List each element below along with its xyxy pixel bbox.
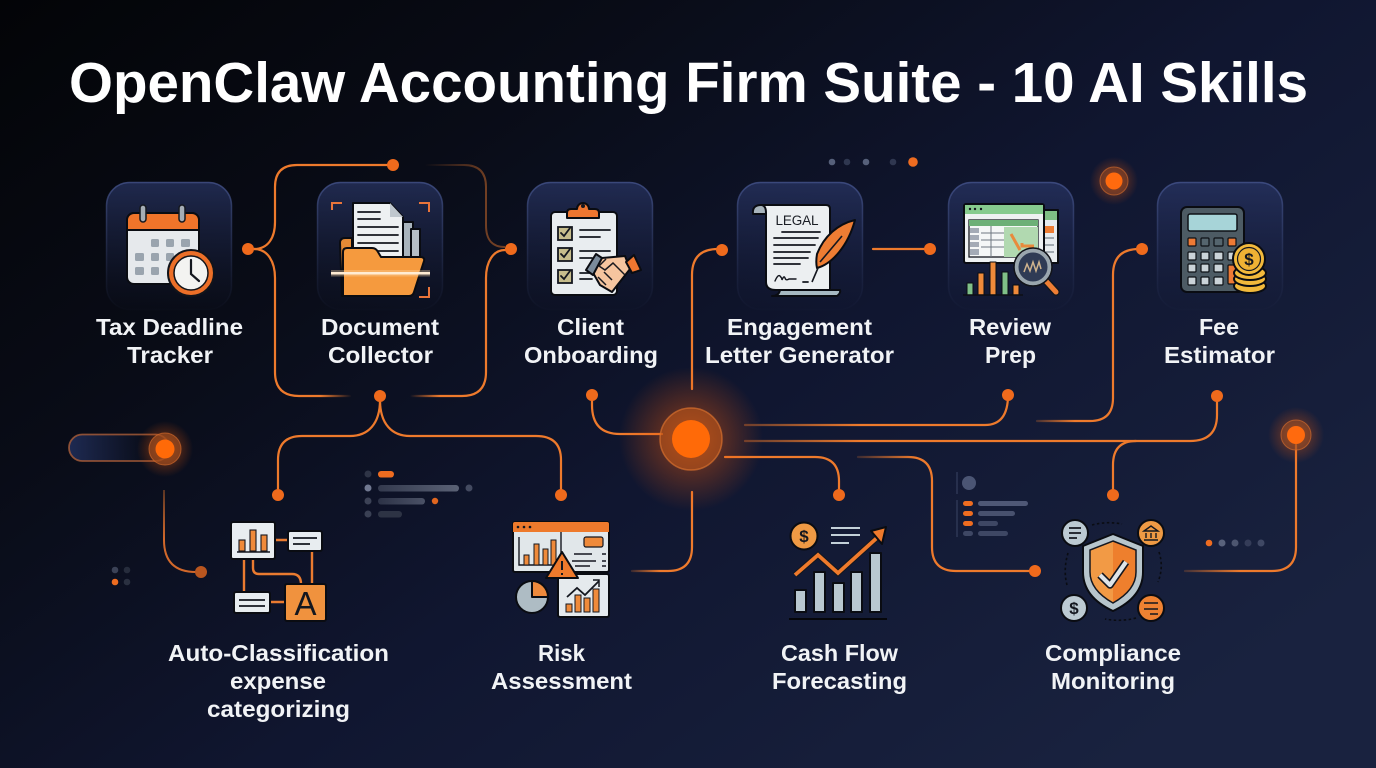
label: Prep	[985, 342, 1036, 368]
icon: chart with rising arrow	[789, 522, 887, 619]
icon: chart with rising arrow: $	[799, 527, 809, 546]
connector: onboarding to lower bracket	[411, 250, 505, 396]
connector: collector branch left	[278, 400, 380, 495]
connector: collector branch right	[380, 400, 561, 495]
connector: risk to hub	[632, 492, 692, 571]
skill: Auto-Classification	[168, 522, 389, 722]
connector: hub to fee estimator	[745, 396, 1217, 441]
label: Auto-Classification	[168, 640, 389, 666]
label: Assessment	[491, 668, 632, 694]
connector: compliance to side hub	[1185, 445, 1296, 571]
label: Compliance	[1045, 640, 1181, 666]
connector: review to fee estimator	[1037, 249, 1142, 421]
connector: hub to engagement letter	[692, 249, 722, 389]
skill: Document Collector	[318, 182, 442, 368]
label: Risk	[538, 640, 585, 666]
connector: hub to cash flow	[725, 457, 839, 495]
icon: legal scroll and quill	[753, 205, 855, 296]
skill: Compliance Monitoring	[1045, 520, 1181, 694]
connector: onboarding to hub	[592, 395, 662, 434]
skill: Tax Deadline Tracker	[96, 182, 243, 368]
skill: Cash Flow Forecasting	[772, 522, 907, 694]
connector: hub to review prep	[745, 395, 1008, 425]
card	[948, 182, 1074, 310]
skill: Client Onboarding	[524, 182, 658, 368]
label: Cash Flow	[781, 640, 898, 666]
glowing node right	[1268, 407, 1324, 463]
label: Fee	[1199, 314, 1239, 340]
icon: clipboard with handshake	[551, 203, 641, 295]
connector: pill to auto-classification	[164, 490, 201, 572]
label: Review	[969, 314, 1051, 340]
connector: cash flow to compliance	[858, 457, 1035, 571]
connector: fee line to compliance	[1113, 441, 1136, 495]
decorative dots left	[112, 567, 130, 585]
label: expense	[230, 668, 326, 694]
label: Tax Deadline	[96, 314, 243, 340]
connector: tracker to top node	[254, 165, 393, 249]
card	[738, 182, 862, 310]
icon: classification flow	[231, 522, 326, 622]
label: Tracker	[127, 342, 213, 368]
card	[528, 182, 652, 310]
icon: shield with orbiting badges	[1061, 520, 1164, 621]
skill: Fee Estimator	[1158, 182, 1282, 368]
icon: calculator with coins	[1181, 207, 1266, 293]
connector nodes	[195, 159, 1223, 578]
decorative list widget center	[364, 470, 472, 518]
label: Engagement	[727, 314, 872, 340]
skill: Review Prep	[948, 182, 1074, 368]
central hub	[619, 367, 763, 511]
icon: legal scroll and quill: LEGAL	[776, 213, 819, 228]
card	[1158, 182, 1282, 310]
icon: calendar with clock	[127, 205, 214, 296]
icon: classification flow: A	[294, 585, 317, 622]
decorative dots top	[829, 157, 918, 167]
label: Onboarding	[524, 342, 658, 368]
glowing node top right	[1090, 157, 1138, 205]
connector: faint upper bracket	[425, 165, 505, 247]
skill: Risk Assessment	[491, 522, 632, 694]
decorative list widget right	[957, 472, 1028, 537]
icon: calculator with coins: $	[1244, 250, 1254, 269]
icon: folder with documents	[331, 203, 430, 297]
card	[106, 182, 232, 310]
label: Monitoring	[1051, 668, 1175, 694]
label: Client	[557, 314, 624, 340]
label: Forecasting	[772, 668, 907, 694]
label: Collector	[328, 342, 433, 368]
glowing pill left	[69, 421, 193, 477]
skill: Engagement Letter Generator	[705, 182, 894, 368]
label: categorizing	[207, 696, 350, 722]
icon: spreadsheet, bars and magnifier	[963, 204, 1058, 295]
decorative dots right	[1206, 540, 1264, 546]
icon: shield with orbiting badges: $	[1069, 599, 1079, 618]
label: Letter Generator	[705, 342, 894, 368]
label: Estimator	[1164, 342, 1275, 368]
connector: engagement to review	[873, 248, 930, 250]
connector: tracker to lower bracket	[254, 249, 350, 396]
icon: dashboard with warning	[513, 522, 609, 617]
label: Document	[321, 314, 439, 340]
card	[318, 182, 442, 310]
connector network	[164, 159, 1296, 578]
title: OpenClaw Accounting Firm Suite - 10 AI Skills	[69, 51, 1308, 115]
